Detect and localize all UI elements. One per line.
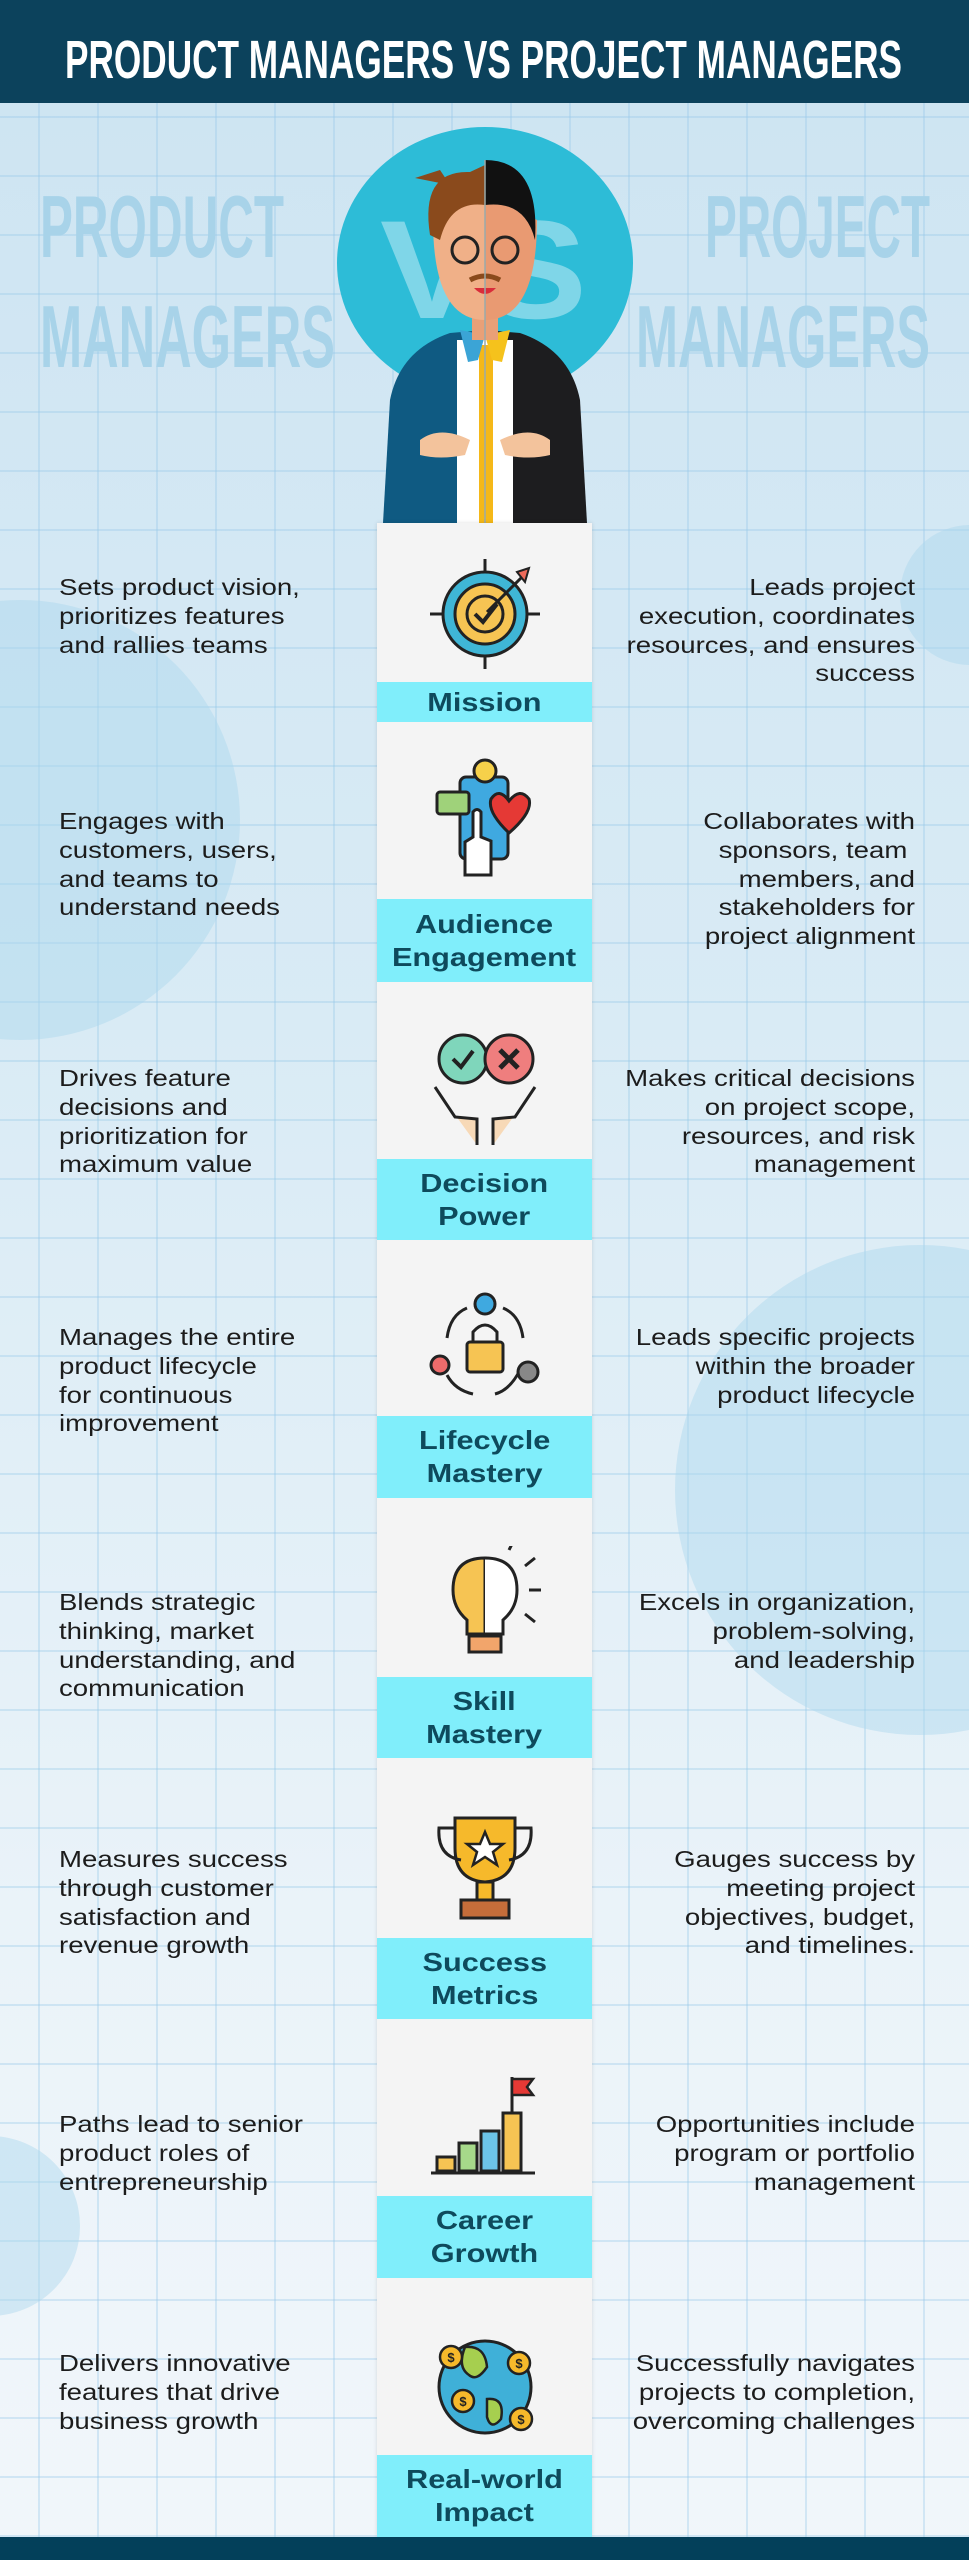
right text: engagement bbox=[703, 808, 915, 949]
label: mission: Mission bbox=[427, 686, 542, 716]
watermark: product managers bbox=[40, 177, 335, 386]
right text: decision: resources, and risk bbox=[682, 1123, 915, 1149]
label: success metrics bbox=[377, 1938, 592, 2019]
right text: engagement: project alignment bbox=[705, 923, 915, 949]
icon: light bulb bbox=[452, 1546, 541, 1654]
left text: success: revenue growth bbox=[59, 1932, 249, 1958]
section 6: success metrics bbox=[59, 1816, 915, 2019]
header bar with title bbox=[0, 0, 969, 103]
left text: decision bbox=[59, 1065, 252, 1177]
right text: success: and timelines. bbox=[745, 1932, 915, 1958]
left text: lifecycle: improvement bbox=[59, 1410, 219, 1436]
left text: engagement bbox=[59, 808, 280, 920]
label: career growth: Career bbox=[436, 2205, 533, 2235]
left text: engagement: and teams to bbox=[59, 866, 219, 892]
left text: engagement: Engages with bbox=[59, 808, 225, 834]
icon: check and cross bbox=[434, 1034, 536, 1145]
left text: engagement: understand needs bbox=[59, 894, 280, 920]
icon: globe with coins bbox=[438, 2340, 534, 2434]
right text: impact: overcoming challenges bbox=[633, 2408, 915, 2434]
right text: engagement: stakeholders for bbox=[719, 894, 915, 920]
right text: success: Gauges success by bbox=[674, 1846, 915, 1872]
label: audience engagement: Engagement bbox=[392, 942, 577, 972]
left text: mission bbox=[59, 574, 300, 658]
right text: mission: execution, coordinates bbox=[639, 603, 915, 629]
icon: globe with coins: $ bbox=[515, 2356, 523, 2371]
left text: lifecycle: Manages the entire bbox=[59, 1324, 295, 1350]
left text: career bbox=[59, 2111, 303, 2195]
left text: lifecycle: for continuous bbox=[59, 1382, 232, 1408]
section 1: mission bbox=[59, 559, 915, 722]
right text: decision: Makes critical decisions bbox=[625, 1065, 915, 1091]
right text: engagement: Collaborates with bbox=[703, 808, 915, 834]
label: audience engagement bbox=[377, 899, 592, 982]
right text: decision: on project scope, bbox=[705, 1094, 915, 1120]
right text: decision bbox=[625, 1065, 915, 1177]
left text: lifecycle: product lifecycle bbox=[59, 1353, 257, 1379]
left text: career: entrepreneurship bbox=[59, 2169, 268, 2195]
icon: globe with coins: $ bbox=[459, 2394, 467, 2409]
left text: decision: decisions and bbox=[59, 1094, 228, 1120]
left text: engagement: customers, users, bbox=[59, 837, 277, 863]
left text: success: through customer bbox=[59, 1875, 274, 1901]
icon: phone with heart bbox=[436, 758, 532, 876]
icon: globe with coins: $ bbox=[517, 2412, 525, 2427]
label: skill mastery: Mastery bbox=[427, 1718, 542, 1748]
left text: skill: Blends strategic bbox=[59, 1589, 255, 1615]
label: real-world impact bbox=[377, 2455, 592, 2537]
right text: lifecycle: Leads specific projects bbox=[636, 1324, 915, 1350]
right text: skill: and leadership bbox=[734, 1647, 915, 1673]
label: audience engagement: Audience bbox=[415, 908, 554, 938]
left text: career: product roles of bbox=[59, 2140, 249, 2166]
right text: career: management bbox=[754, 2169, 915, 2195]
left text: skill: communication bbox=[59, 1675, 245, 1701]
label: lifecycle mastery: Lifecycle bbox=[419, 1425, 550, 1455]
left text: mission: Sets product vision, bbox=[59, 574, 300, 600]
right text: skill bbox=[639, 1589, 915, 1673]
icon: globe with coins: $ bbox=[447, 2350, 455, 2365]
right text: engagement: sponsors, team bbox=[719, 837, 907, 863]
right text: success: meeting project bbox=[726, 1875, 915, 1901]
label: career growth bbox=[377, 2196, 592, 2278]
left text: decision: Drives feature bbox=[59, 1065, 231, 1091]
label: decision power bbox=[377, 1159, 592, 1240]
icon: target bbox=[430, 559, 540, 669]
section 3: decision power bbox=[59, 1034, 915, 1240]
right text: skill: Excels in organization, bbox=[639, 1589, 915, 1615]
right text: success bbox=[674, 1846, 915, 1958]
watermark: product managers: MANAGERS bbox=[40, 287, 335, 386]
left text: success: Measures success bbox=[59, 1846, 288, 1872]
left text: impact: business growth bbox=[59, 2408, 258, 2434]
right text: career bbox=[656, 2111, 915, 2195]
icon: bar chart with flag bbox=[431, 2077, 536, 2174]
left text: skill: thinking, market bbox=[59, 1618, 254, 1644]
person bbox=[383, 160, 587, 523]
left text: impact: Delivers innovative bbox=[59, 2350, 291, 2376]
right text: impact: projects to completion, bbox=[639, 2379, 915, 2405]
right text: mission: success bbox=[815, 660, 915, 686]
left text: decision: maximum value bbox=[59, 1151, 252, 1177]
right text: skill: problem-solving, bbox=[712, 1618, 915, 1644]
section 5: skill mastery bbox=[59, 1546, 915, 1758]
right text: engagement: members, and bbox=[739, 866, 915, 892]
right text: decision: management bbox=[754, 1151, 915, 1177]
right text: mission: Leads project bbox=[749, 574, 915, 600]
label: real-world impact: Real-world bbox=[406, 2464, 563, 2494]
label: success metrics: Success bbox=[422, 1946, 547, 1976]
left text: success: satisfaction and bbox=[59, 1904, 251, 1930]
label: lifecycle mastery bbox=[377, 1416, 592, 1498]
right text: lifecycle: within the broader bbox=[696, 1353, 915, 1379]
icon: trophy bbox=[437, 1816, 533, 1920]
section 4: lifecycle mastery bbox=[59, 1292, 915, 1498]
left text: lifecycle bbox=[59, 1324, 295, 1436]
right text: career: Opportunities include bbox=[656, 2111, 915, 2137]
right text: career: program or portfolio bbox=[674, 2140, 915, 2166]
left text: career: Paths lead to senior bbox=[59, 2111, 303, 2137]
label: success metrics: Metrics bbox=[431, 1980, 538, 2010]
circle backdrop bbox=[337, 127, 633, 399]
label: decision power: Decision bbox=[421, 1168, 548, 1198]
left text: success bbox=[59, 1846, 288, 1958]
left text: skill bbox=[59, 1589, 295, 1701]
section 7: career growth bbox=[59, 2077, 915, 2278]
label: real-world impact: Impact bbox=[435, 2497, 534, 2527]
icon: cycle with lock bbox=[430, 1292, 540, 1396]
label: skill mastery bbox=[377, 1677, 592, 1758]
left text: decision: prioritization for bbox=[59, 1123, 248, 1149]
watermark: product managers: PRODUCT bbox=[40, 177, 284, 276]
section 8: real-world impact bbox=[59, 2340, 915, 2537]
left text: impact bbox=[59, 2350, 291, 2434]
right text: impact: Successfully navigates bbox=[636, 2350, 915, 2376]
hero illustration: watermarks, circle and person bbox=[40, 127, 930, 523]
label: career growth: Growth bbox=[431, 2238, 538, 2268]
right text: lifecycle: product lifecycle bbox=[717, 1382, 915, 1408]
label: mission bbox=[377, 682, 592, 722]
right text: mission bbox=[627, 574, 915, 686]
watermark: project managers bbox=[636, 177, 930, 386]
section 2: audience engagement bbox=[59, 758, 915, 982]
center column backgrounds bbox=[377, 523, 592, 2537]
right text: impact bbox=[633, 2350, 915, 2434]
left text: mission: prioritizes features bbox=[59, 603, 285, 629]
VS letters: VS bbox=[380, 191, 587, 348]
right text: mission: resources, and ensures bbox=[627, 632, 915, 658]
left text: impact: features that drive bbox=[59, 2379, 280, 2405]
footer bar bbox=[0, 2537, 969, 2560]
label: skill mastery: Skill bbox=[453, 1686, 516, 1716]
label: lifecycle mastery: Mastery bbox=[426, 1458, 542, 1488]
label: decision power: Power bbox=[438, 1200, 531, 1230]
right text: lifecycle bbox=[636, 1324, 915, 1408]
left text: skill: understanding, and bbox=[59, 1647, 295, 1673]
left text: mission: and rallies teams bbox=[59, 632, 268, 658]
right text: success: objectives, budget, bbox=[685, 1904, 915, 1930]
